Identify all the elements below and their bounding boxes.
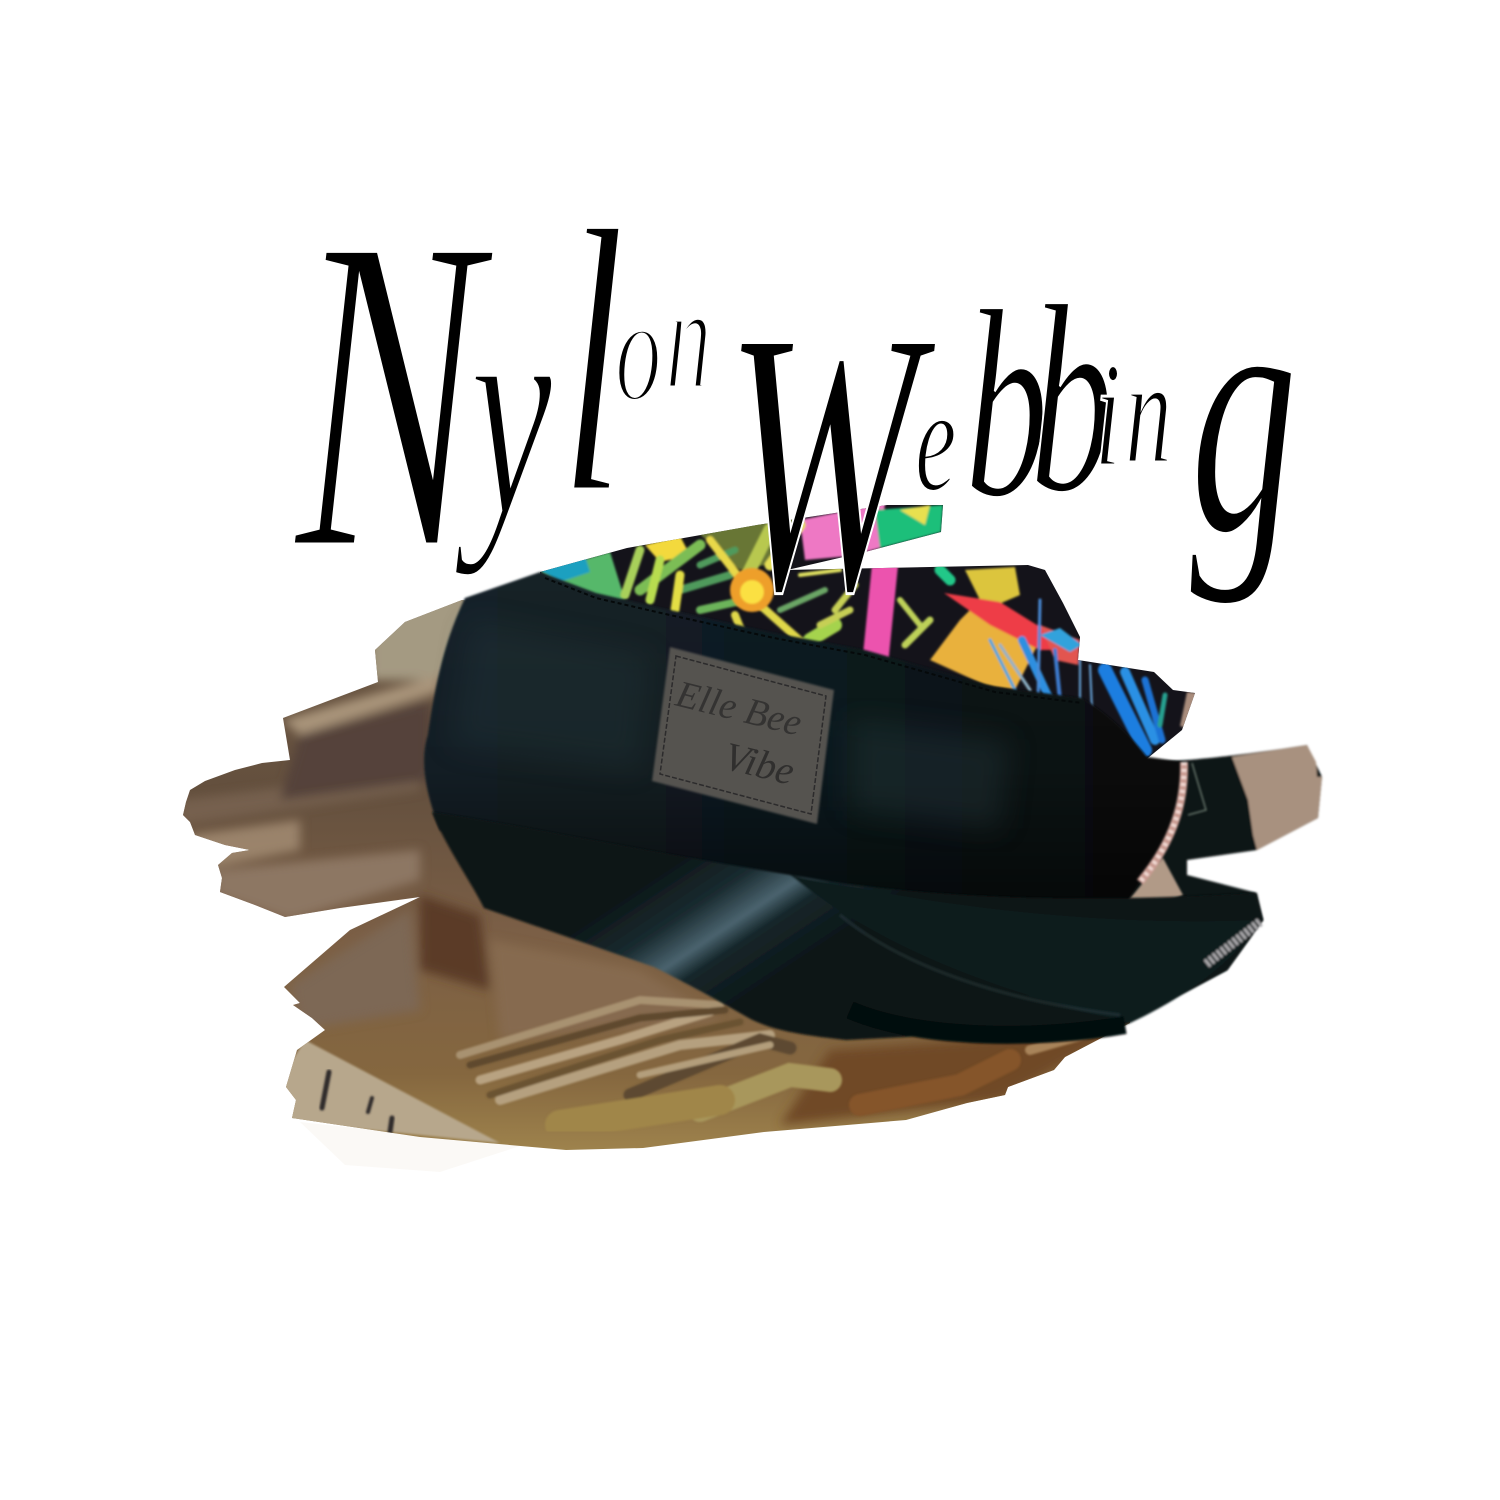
wood grain (460, 1000, 1100, 1125)
top seam stitching (545, 578, 1082, 703)
leather brand patch (652, 647, 834, 824)
title word: Nylon: N (291, 144, 496, 642)
infographic canvas (183, 228, 1324, 1172)
pink stem (875, 565, 885, 665)
black bag body (424, 572, 1183, 935)
leather highlight (450, 620, 650, 770)
patch logo text: Elle Bee (671, 673, 806, 745)
zipper back panel and tan wall (1100, 745, 1322, 1020)
wooden table (170, 590, 1150, 1160)
photo: bag on wooden table in brush mask (170, 495, 1322, 1160)
title word: Webbing: i (1095, 332, 1121, 497)
floral fabric lining (540, 505, 1195, 758)
leather brand patch: Vibe (720, 733, 799, 794)
title word: Webbing: b (1030, 250, 1114, 549)
title word: Nylon: o (615, 267, 662, 432)
plank end grain (280, 1040, 500, 1143)
title word: Webbing: W (725, 255, 939, 670)
flower (730, 568, 774, 612)
title word: Nylon: n (665, 255, 712, 420)
title word: Nylon: l (560, 152, 625, 573)
title word: Webbing: b (965, 255, 1048, 554)
title: Nylon Webbing (291, 144, 1298, 670)
faint mask residue under photo (300, 1122, 520, 1172)
strap end weave (1205, 922, 1260, 965)
title word: Webbing: n (1125, 329, 1172, 494)
title word: Webbing: e (915, 357, 956, 522)
red feather (944, 593, 1060, 650)
title word: Nylon: y (454, 245, 553, 577)
title word: Webbing: g (1190, 219, 1298, 607)
tan triangle and rose gold zipper (1107, 762, 1206, 927)
nylon webbing strap (432, 812, 1263, 1040)
